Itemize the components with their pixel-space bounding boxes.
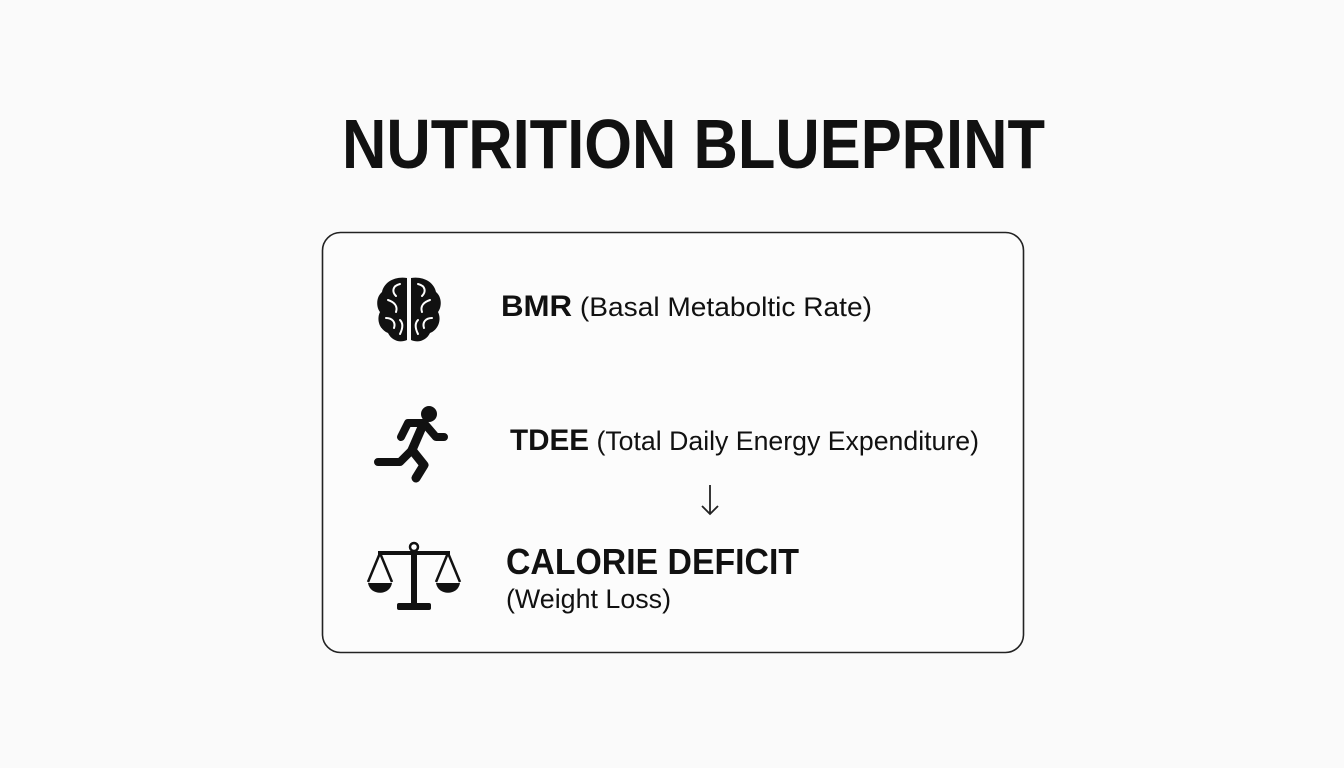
icon: runner xyxy=(378,406,444,478)
icon: balance scale xyxy=(368,543,460,610)
icon: brain xyxy=(377,278,441,341)
text: BMR: BMR (Basal Metaboltic Rate) xyxy=(501,290,872,323)
panel: blueprint steps xyxy=(322,232,1024,652)
arrow: down xyxy=(702,485,718,514)
text: TDEE: TDEE (Total Daily Energy Expenditure) xyxy=(510,424,979,457)
text: weight loss: (Weight Loss) xyxy=(506,584,671,614)
text: calorie deficit: CALORIE DEFICIT xyxy=(506,541,799,582)
title: NUTRITION BLUEPRINT xyxy=(342,105,1045,183)
